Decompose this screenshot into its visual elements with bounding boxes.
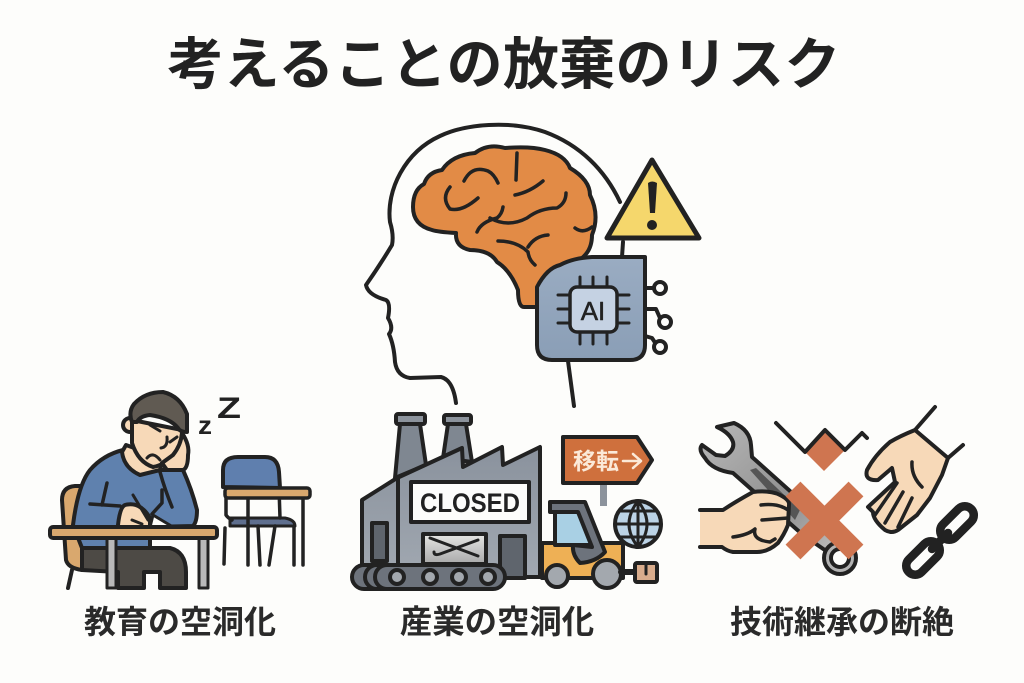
label: skills: 技術継承の断絶 <box>730 604 954 640</box>
brain <box>413 146 596 307</box>
gripping hand <box>700 491 789 552</box>
closed sign <box>411 482 529 522</box>
red cross <box>793 489 856 552</box>
AI chip icon <box>537 257 671 360</box>
right door <box>500 536 525 578</box>
illustration: broken skill transfer <box>700 407 978 579</box>
neck and collar <box>122 445 162 475</box>
open hand <box>866 407 963 532</box>
title: 考えることの放棄のリスク <box>167 33 841 96</box>
warning triangle icon <box>607 160 699 238</box>
small door <box>372 523 387 561</box>
relocation sign: 移転 <box>573 448 619 474</box>
trousers <box>82 548 186 588</box>
neck back line <box>568 361 574 406</box>
sleep letters: z <box>198 410 212 440</box>
label: industry: 産業の空洞化 <box>400 604 594 640</box>
sleep letters <box>198 392 241 440</box>
broken chain <box>902 502 978 579</box>
chair back <box>62 486 82 570</box>
illustration: sleepy student <box>50 392 310 588</box>
empty chair and desk <box>223 457 310 565</box>
zigzag and diamond <box>776 423 867 471</box>
chimneys <box>395 414 472 478</box>
illustration: factory closed <box>352 414 661 589</box>
sweater <box>73 450 197 548</box>
neck line behind warning <box>622 242 623 257</box>
label: education: 教育の空洞化 <box>84 604 276 640</box>
factory building <box>362 447 540 577</box>
head <box>123 392 187 467</box>
pencil hand <box>118 495 173 527</box>
forklift <box>542 502 635 588</box>
cargo box <box>635 563 657 582</box>
hand on cheek <box>162 433 188 470</box>
globe icon <box>615 501 661 547</box>
conveyor belt <box>352 565 505 589</box>
sleep letters: Z <box>217 392 241 425</box>
AI chip icon: AI <box>581 296 605 326</box>
relocation sign <box>563 437 652 506</box>
closed sign: CLOSED <box>420 488 520 518</box>
head outline <box>366 125 620 403</box>
wrench <box>701 423 856 574</box>
desk <box>50 527 217 588</box>
illustration: head with brain and AI chip <box>366 125 699 406</box>
boarded garage door <box>423 534 486 564</box>
